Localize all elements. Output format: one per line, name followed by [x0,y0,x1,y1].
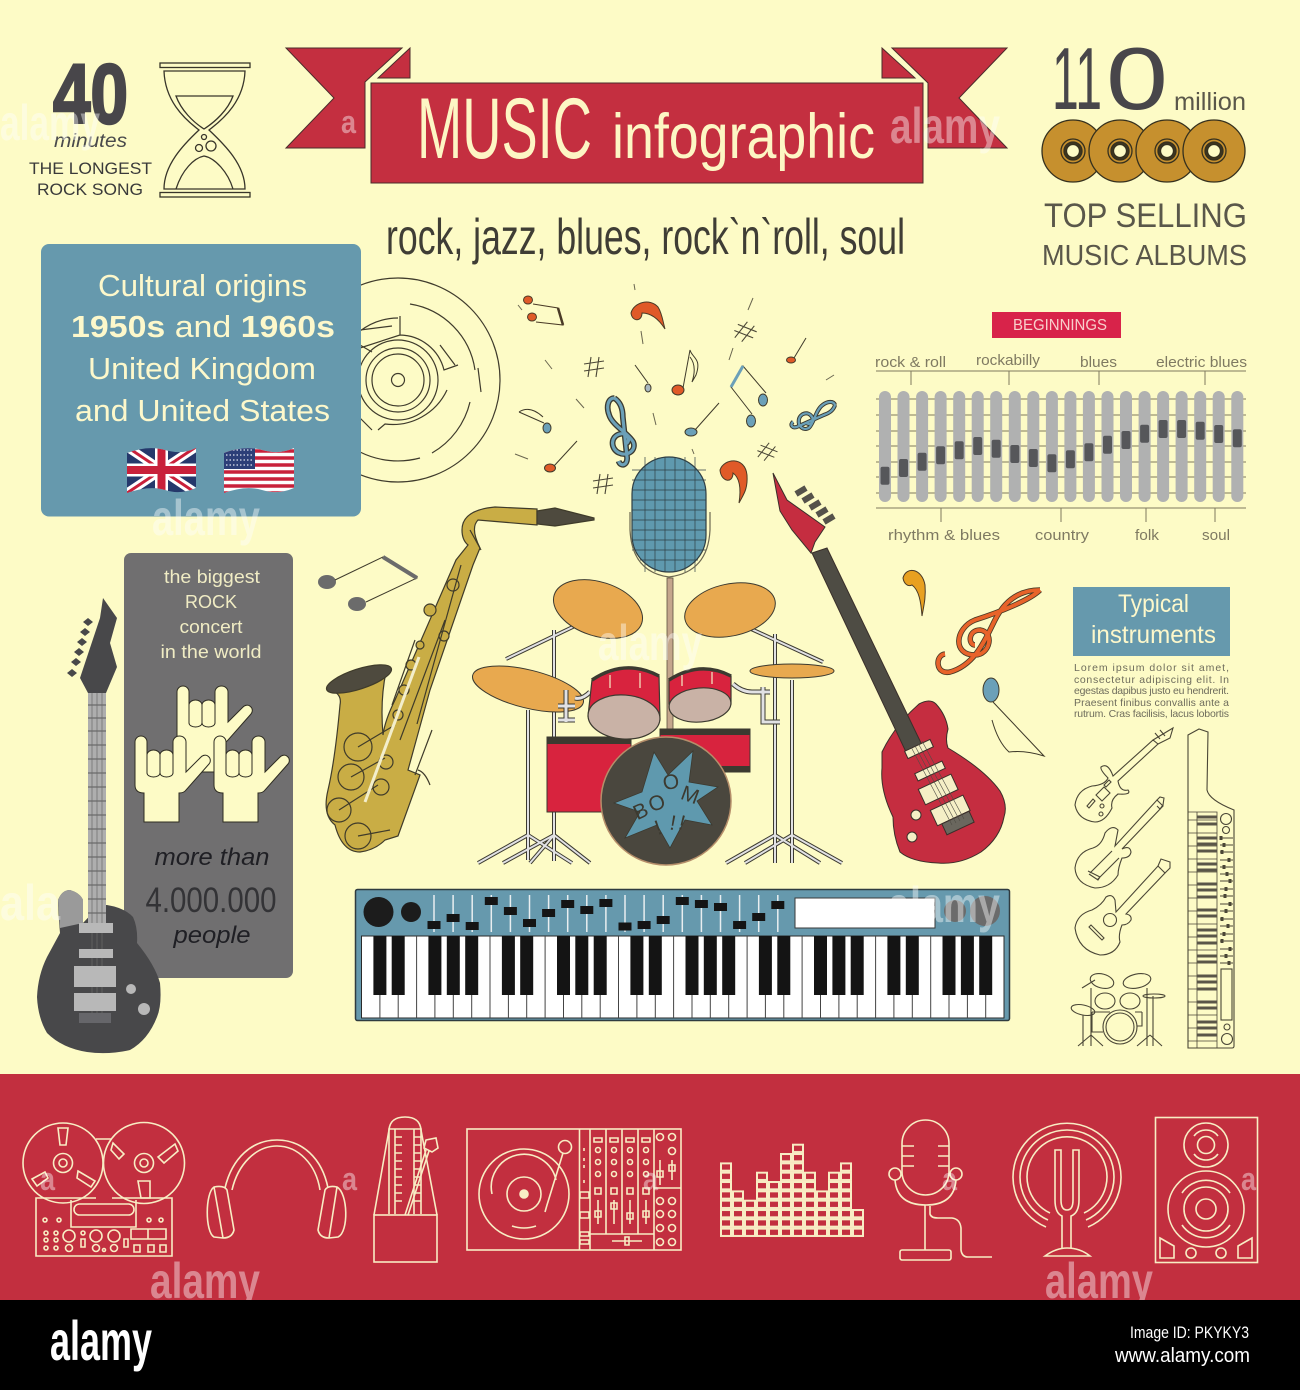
guitar body [882,701,1005,863]
decorative notes right [903,570,1044,756]
stat: 110 million albums [1042,29,1247,272]
blue treble clef [608,398,634,465]
guitar strings [910,741,964,825]
ribbon right tail [892,48,1007,148]
boom burst: ! [652,816,665,840]
lorem ipsum paragraph: Praesent finibus convallis ante a [1074,697,1229,709]
icon: turntable and mixer [467,1129,681,1250]
chart heading [992,312,1121,338]
website: www.alamy.com [1114,1345,1250,1367]
stat: 110 million albums: MUSIC ALBUMS [1042,240,1247,272]
boom burst: O [645,790,669,817]
white keys [362,936,1004,1018]
title text: MUSIC [417,81,592,177]
lorem ipsum paragraph [1074,662,1229,720]
origins text: United Kingdom [88,351,316,386]
blue beamed note [731,366,768,427]
icon: rock hands [135,686,289,822]
side drum right [660,729,750,772]
origins text [71,268,335,428]
keyboard [356,890,1010,1020]
grey guitar pegs [67,618,93,677]
bass drum [601,737,731,865]
slider knobs [880,420,1242,485]
stat: 110 million albums: TOP SELLING [1044,197,1247,235]
watermarks: alamy [0,95,100,151]
black credit bar [0,1300,1300,1390]
watermarks: alamy [598,615,702,671]
watermarks: ala [0,875,61,931]
stat: 40 minutes: minutes [54,131,128,152]
origins text: 1950s and 1960s [71,309,335,344]
ribbon main band [371,83,923,183]
stat: 110 million albums: 0 [1106,29,1168,128]
icon: four gold discs [1042,120,1245,182]
red electric guitar [773,473,1005,863]
black keys [373,936,992,995]
alamy logo: alamy [50,1309,152,1372]
panel: biggest rock concert [124,553,293,978]
mic stand [667,578,673,733]
concert stat: more than [154,844,270,871]
sharps [584,318,779,494]
sax bell opening [324,659,394,699]
concert heading: the biggest [164,567,260,587]
small horizontal treble clef [788,400,839,433]
icon: reel to reel tape recorder [23,1122,184,1256]
icon: US flag [224,445,294,495]
grey guitar body [37,890,161,1053]
concert heading: ROCK [185,592,237,612]
watermarks: a [942,1161,957,1197]
grey pin note [635,365,651,392]
ribbon right fold [882,48,915,78]
origins text: and United States [75,393,330,428]
concert heading [160,567,262,662]
tom left [587,668,661,741]
sax mouthpiece [537,508,594,526]
instruments heading: instruments [1091,621,1216,649]
concert heading: in the world [160,642,262,662]
icon: headphones [207,1140,346,1238]
grey guitar horn highlight [58,890,83,928]
top genre labels: electric blues [1156,354,1247,371]
keyboard faders [434,895,778,932]
microphone [630,457,710,733]
guitar pegs [796,488,834,522]
watermarks: a [342,1161,357,1197]
ribbon left tail [286,48,402,148]
splash cymbal right [750,664,834,678]
saxophone [324,507,594,852]
origins text: Cultural origins [98,268,307,303]
lorem ipsum paragraph: consectetur adipiscing elit. In [1074,674,1229,686]
drum kit [468,569,842,865]
top genre labels: blues [1080,354,1117,371]
icon: line drum kit [1070,971,1165,1046]
mic head [632,457,706,572]
stat: 110 million albums: 11 [1052,29,1102,128]
bottom genre labels: rhythm & blues [888,527,1000,544]
ride cymbal left [468,657,588,721]
blue flagged note [519,409,551,433]
orange bass clef near guitar [720,461,747,503]
boom burst: M [678,782,702,809]
lorem ipsum paragraph: Lorem ipsum dolor sit amet, [1074,662,1229,674]
top genre labels [875,352,1247,371]
boom burst: ! [676,811,688,835]
watermarks: alamy [152,490,260,546]
watermarks: alamy [890,98,1000,154]
icon: line semi-hollow guitar [1075,797,1164,888]
panel: typical instruments [1070,587,1234,1048]
blue crotchet [685,403,719,436]
icon: loudspeaker [1156,1118,1258,1262]
boom burst: B [630,798,652,825]
icon: line keytar [1188,729,1234,1048]
icon: double note [318,557,417,611]
stat: 40 minutes: ROCK SONG [37,180,143,199]
watermarks: a [40,1161,55,1197]
watermarks: alamy [150,1253,260,1309]
concert stat [146,844,276,949]
bottom genre labels: country [1035,527,1090,544]
icon: studio microphone [889,1120,992,1260]
boom burst [614,751,718,848]
guitar neck [812,548,922,752]
concert heading: concert [180,617,242,637]
sax keys [327,579,459,849]
watermarks: a [643,1161,658,1197]
title ribbon [286,48,1007,183]
grey electric guitar [37,598,161,1053]
orange beamed note [524,296,563,325]
grey guitar pickups [74,923,150,1023]
concert stat: 4.000.000 [146,881,276,920]
icon: hourglass [160,63,250,197]
stat: 110 million albums: million [1174,88,1246,116]
image id: Image ID: PKYKY3 [1130,1323,1249,1342]
floating notes above microphone [515,284,839,503]
slider tracks [879,391,1243,502]
motion ticks [515,284,834,459]
icon: UK flag [127,445,196,495]
side drum left [547,737,631,812]
orange crotchet [544,441,577,472]
guitar head [773,473,825,553]
watermarks: a [1241,1161,1256,1197]
orange treble clef [938,590,1040,672]
instruments heading [1073,587,1230,656]
stat: 40 minutes: 40 [53,47,128,141]
watermarks: alamy [888,877,1000,933]
instruments heading: Typical [1118,590,1189,618]
lorem ipsum paragraph: rutrum. Cras facilisis, lacus lobortis [1074,708,1229,720]
gold rest note [903,570,925,616]
blue note with tail [983,678,1044,756]
stat: 40 minutes [29,47,152,199]
subtitle: rock, jazz, blues, rock`n`roll, soul [386,209,905,265]
icon: line acoustic guitar [1075,859,1170,955]
red footer band [0,1074,1300,1300]
drum stands [478,624,842,863]
crash cymbal right [680,575,780,645]
keyboard display [795,898,935,928]
concert stat: people [172,922,250,949]
watermarks: alamy [1045,1253,1153,1309]
icon: tuning fork [1013,1123,1121,1256]
tom right [668,669,732,725]
bottom genre labels: soul [1202,527,1230,544]
keyboard dials [364,896,1000,927]
watermarks: a [341,104,356,140]
title text [417,81,875,177]
icon: metronome [374,1117,438,1262]
chart: beginnings timeline sliders [875,312,1247,544]
lorem ipsum paragraph: egestas dapibus justo eu hendrerit. [1074,685,1229,697]
boom burst: ! [668,811,678,835]
guitar pickups and bridge [905,739,974,842]
grey guitar head [80,598,117,693]
boom burst: O [661,770,681,795]
icon: equalizer [720,1144,864,1237]
grey guitar neck [88,693,106,925]
red quaver [672,350,698,395]
panel: cultural origins [41,244,361,516]
chart heading: BEGINNINGS [1013,317,1107,334]
bottom genre labels [888,527,1230,544]
top genre labels: rockabilly [976,352,1040,369]
crash cymbal left [546,569,650,649]
vinyl record labyrinth [296,278,500,482]
top genre labels: rock & roll [875,354,946,371]
red small crotchet [786,338,806,363]
orange bass clef [631,302,665,329]
icon: line electric guitar [1075,728,1173,822]
drum rack clamps [558,684,780,722]
bottom genre labels: folk [1135,527,1160,544]
stat: 40 minutes: THE LONGEST [29,159,152,178]
ribbon left fold [378,48,410,78]
title text: infographic [612,102,875,172]
